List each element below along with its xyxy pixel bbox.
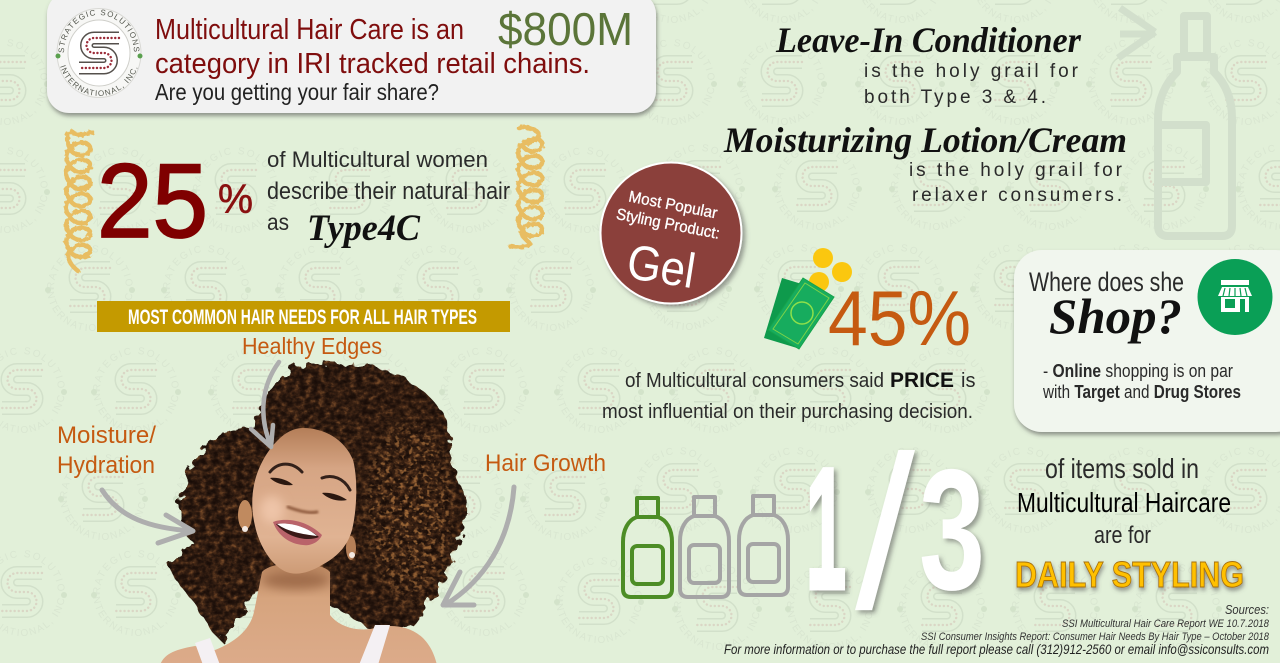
headline text: Multicultural Hair Care is an [155,14,464,46]
green bottle [623,498,672,597]
text: type 4C statement: of Multicultural women [267,147,488,172]
nose shadow [288,507,317,513]
label: healthy edges with arrow: Healthy Edges [242,333,382,359]
stat: one third: 3 [919,434,985,626]
label: moisture hydration with arrow: Moisture/ [57,422,156,449]
text: type 4C statement: Type4C [307,208,421,249]
panel: headline: Are you getting your fair share? [155,79,439,105]
heading: daily styling: DAILY STYLING [1015,554,1244,595]
text: type 4C statement: as [267,209,289,235]
text: moisturizing lotion: is the holy grail for [909,160,1123,181]
text: price statement: PRICE [890,369,954,392]
panel: where does she shop: Where does she [1029,267,1184,297]
text: moisturizing lotion: Moisturizing Lotion/Cream [723,120,1127,160]
panel: headline: category in IRI tracked retail chains. [155,48,590,80]
text: type 4C statement [267,147,510,249]
text: price statement: of Multicultural consumers said [625,370,884,392]
stat: one third [806,412,985,655]
text: type 4C statement: describe their natural hair [267,178,510,205]
faded spray bottle icon [1118,8,1232,236]
panel: where does she shop: with Target and Drug Stores [1042,382,1241,402]
icon: store [1198,259,1272,335]
arrow: hair growth [443,487,514,605]
text: leave-in conditioner [775,20,1082,108]
icon: right hair curl [510,127,542,247]
sources [724,602,1270,657]
badge: most popular styling product: Most Popular [627,189,719,223]
text: price statement: is [961,370,975,392]
text: items sold: Multicultural Haircare [1017,487,1231,518]
label: hair growth with arrow [443,450,606,605]
text: leave-in conditioner: Leave-In Conditioner [775,20,1082,60]
photo: smiling woman with curly hair [160,363,466,665]
earrings [242,526,248,532]
arrow: healthy edges [251,362,279,447]
shoulders and chest [160,563,437,665]
text: leave-in conditioner: both Type 3 & 4. [864,87,1046,108]
smile [273,520,322,545]
badge: most popular styling product [600,162,742,304]
ear [238,500,252,530]
logo: Strategic Solutions International [56,8,142,98]
sources: Sources: [1225,602,1269,617]
grey bottle [680,497,729,597]
banner: most common hair needs: MOST COMMON HAIR NEEDS FOR ALL HAIR TYPES [128,306,477,329]
stat: 25 percent: 25 [97,143,208,260]
text: moisturizing lotion: relaxer consumers. [912,185,1122,206]
market size figure: $800M [498,3,633,55]
stat: one third: 1 [806,433,846,625]
icon: money and coins [764,248,852,349]
label: healthy edges with arrow [242,333,382,447]
label: hair growth with arrow: Hair Growth [485,450,606,477]
text: moisturizing lotion [723,120,1127,206]
text: items sold: are for [1094,522,1151,549]
banner: most common hair needs [97,301,510,332]
panel: where does she shop: - Online shopping is on par [1043,361,1233,381]
eyes [270,478,347,501]
text: price statement [602,369,975,423]
badge: most popular styling product: Gel [623,235,699,299]
label: moisture hydration with arrow: Hydration [57,452,155,479]
panel: where does she shop [1014,250,1280,432]
text: leave-in conditioner: is the holy grail for [864,61,1079,82]
stat: one third: / [855,412,915,655]
stat: 45 percent: 45% [828,274,971,362]
panel: headline [45,0,660,119]
badge: most popular styling product: Styling Product: [615,206,721,243]
cheek highlight [260,496,284,524]
arrow: moisture [102,490,193,543]
text: items sold [1017,453,1231,549]
text: items sold: of items sold in [1045,453,1199,484]
straps [195,625,390,665]
logo: Strategic Solutions International: STRATEGIC SOLUTIONS [58,10,140,53]
panel: where does she shop: Shop? [1049,288,1182,344]
stat: 25 percent: % [218,176,253,222]
logo: Strategic Solutions International: INTERNATIONAL, INC. [60,65,138,96]
hair mass [170,363,466,640]
label: moisture hydration with arrow [57,422,193,543]
chin shadow [262,571,330,589]
text: price statement: most influential on their purchasing decision. [602,401,973,423]
icon: left hair curl [66,132,92,271]
face [252,428,356,574]
grey bottle [739,496,788,595]
icon: three bottles [623,496,788,597]
golden hair highlights [358,405,462,615]
eyebrows [270,464,350,490]
bottom edge strip [0,663,1280,665]
